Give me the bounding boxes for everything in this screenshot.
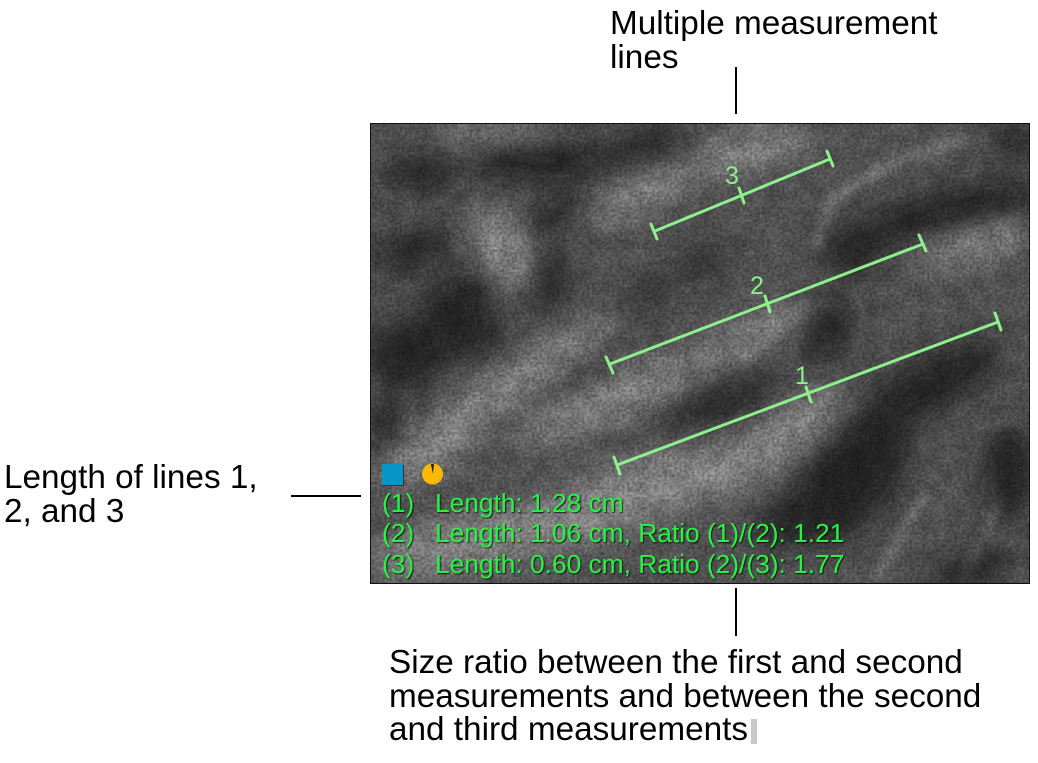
measurement line 3: [651, 151, 833, 239]
text: size ratio explanation: measurements and between the second: [389, 678, 981, 715]
measurement readout text: Length: 0.60 cm, Ratio (2)/(3): 1.77: [435, 549, 844, 579]
text: size ratio explanation: Size ratio between the first and second: [389, 644, 963, 681]
icon: blue square: [382, 464, 404, 486]
icon: yellow clock: [422, 464, 443, 484]
leader line: left annotation: [291, 495, 361, 497]
mammogram image: [362, 117, 1038, 604]
heading: multiple measurement lines: Multiple measurement: [610, 5, 938, 42]
label 3: 3: [725, 162, 739, 190]
leader line: top annotation: [735, 67, 737, 114]
heading: multiple measurement lines: lines: [610, 39, 678, 76]
text: size ratio explanation: and third measurements: [389, 711, 748, 748]
text: length of lines: Length of lines 1,: [4, 459, 258, 496]
measurement readout text: Length: 1.28 cm: [435, 488, 624, 518]
measurement readout text: (3): [382, 549, 414, 579]
text: length of lines: 2, and 3: [4, 493, 124, 530]
measurement line 2: [606, 235, 926, 373]
label 2: 2: [750, 272, 764, 300]
measurement readout text: [382, 488, 844, 579]
measurement readout text: (2): [382, 518, 414, 548]
leader line: bottom annotation: [735, 588, 737, 636]
label 1: 1: [795, 362, 809, 390]
measurement readout text: Length: 1.06 cm, Ratio (1)/(2): 1.21: [435, 518, 844, 548]
text: length of lines: [4, 459, 258, 530]
heading: multiple measurement lines: [610, 5, 938, 76]
measurement readout text: (1): [382, 488, 414, 518]
text: size ratio explanation: [389, 644, 981, 748]
mammogram panel with measurement overlay: [370, 123, 1030, 584]
panel border: [370, 124, 1030, 584]
measurement line 1: [614, 313, 1001, 474]
